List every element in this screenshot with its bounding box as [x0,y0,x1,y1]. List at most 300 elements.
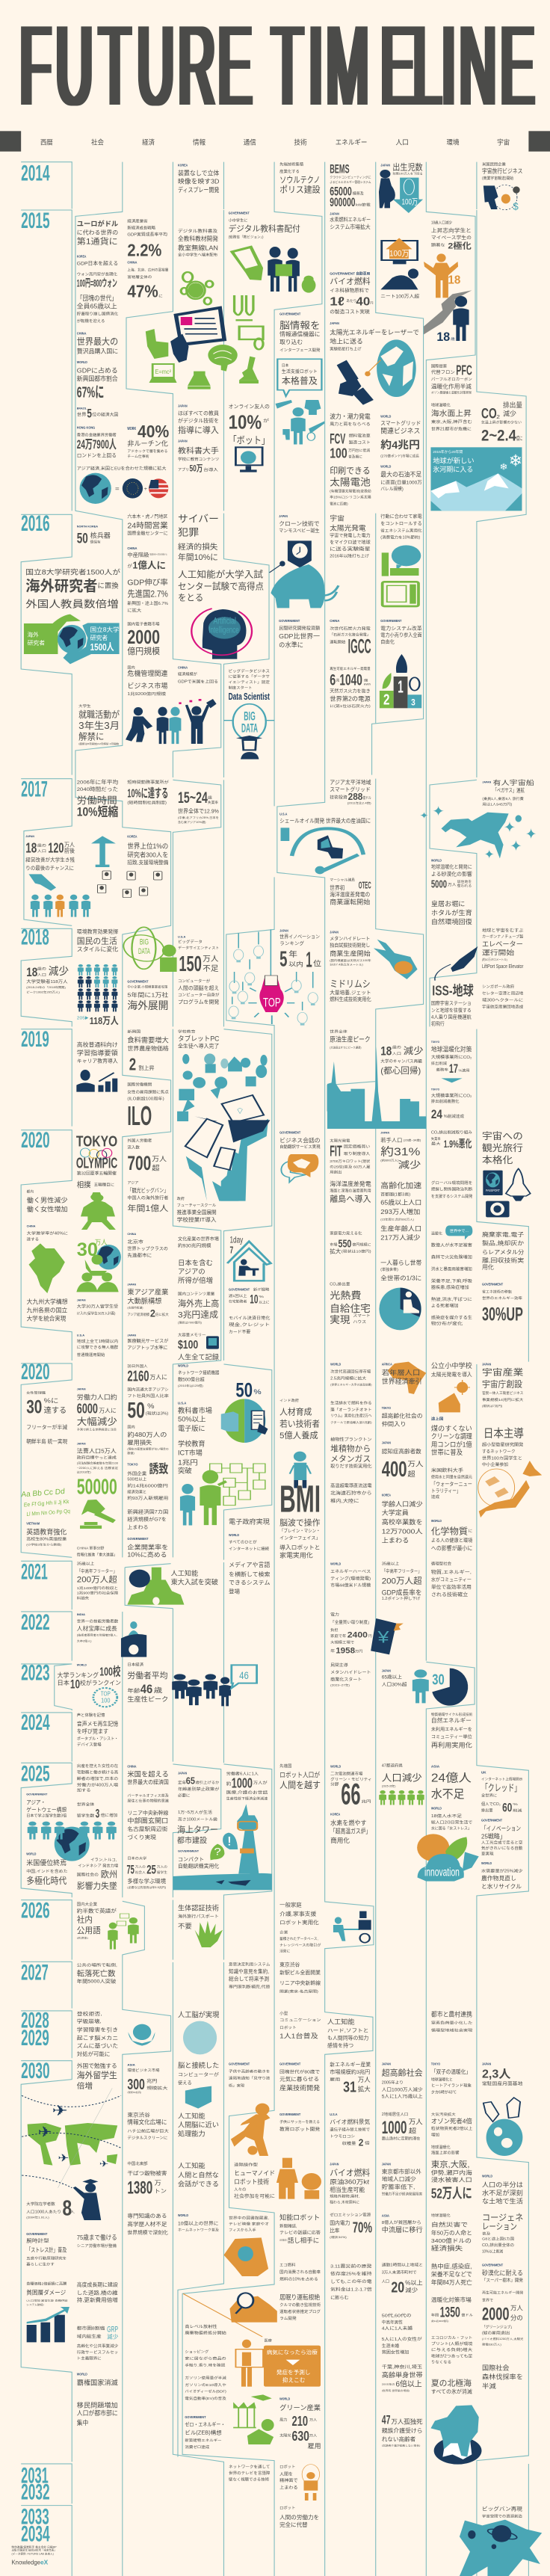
text: Asia gateway: アジア・ [26,1799,46,1805]
column: population second row: 12万7000人 [382,1528,423,1535]
text: electricity reform: 電力小売り参入全面 [380,632,422,638]
text: India engineers: インド政府 [279,1398,299,1403]
text: FCV and printable solar cell: 普及期に [348,454,362,459]
column: population final: 4人に1人未婚 [382,2326,412,2331]
text: Seoul technopolis: ソウルテクノ [279,175,321,185]
text: 2017 [21,777,48,801]
text: innovation 25 strategy: 気がきれいになる自動 [481,1846,522,1851]
text: worker age 46: 46 [140,1683,152,1696]
text: hydrogen [330,212,371,223]
text: space tourism: 宇宙への [482,1131,523,1141]
text: 2029 [21,2025,49,2050]
column: energy second row: 植物性プランクトン [330,1437,372,1442]
text: library and intelligent robot: 世界中の図書館蔵書, [229,2215,269,2220]
column: energy 2020: 自給住宅 [330,1304,371,1314]
text: green industry [279,2397,321,2450]
text: BEMS: よるビルエネルギー管理システム [330,180,371,185]
text: 2021 top of row [77,1561,451,1566]
text: BEMS: kW節電 [356,202,371,207]
text: innovation 25 strategy: と水リサイクル [481,1883,522,1890]
column: environment 2020: を支援するシステム開発 [431,1194,472,1199]
logo: KnowledgeX: eX [40,2559,48,2566]
icon: laptop and tablet [195,1095,264,1123]
text: asia smart grid: (2011年比2.4倍) [347,801,371,805]
text and icon: renewable second: 1040 [339,671,362,689]
column: environment 2030: ヒートアイランド現象 [431,2083,472,2088]
text: Tokyo Olympic [76,1133,117,1176]
text: network TV [229,2465,270,2482]
column: population second row: KOREA [382,1494,391,1497]
icon: robot and BMI: インターフェイス」 [279,1535,321,1541]
text: job hunting: 解禁に [78,732,104,742]
text: retirement 65: 定年 [178,1780,187,1785]
illustration: big bang splash with planet [460,2520,542,2576]
text: nuclear waste, shopping, gasoline, ZEB: ガソリンのE10導入や [185,2382,226,2388]
column: energy 2030: 稲わら,木材原料に [330,2199,359,2204]
text: top researchers [127,835,168,866]
column: energy second row: (世界エネルギー大手の波及効果) [330,1382,372,1386]
text: portable assist device [77,1712,118,1747]
text: crude oil peak: 原油生産ピーク [330,1035,371,1044]
text: English education Vietnam: 英語教育強化 [26,1527,67,1536]
column: environment 2020: 物分布が変化 [431,1321,463,1326]
column: economy growth: 47% [127,282,158,301]
column: energy 2030: 遺伝子組み替え技術で [330,2127,370,2132]
column: space final: 国際社会 [482,2364,510,2372]
chart: people pictogram [77,964,119,1026]
column: info devices and textbooks: U.S.A [178,1402,186,1405]
column: virtual office and Chubu: バーチャルオフィス普及 [127,1793,169,1798]
text: overseas expansion: 中小企業,小規模事業者攻策 [127,985,167,989]
text and icon: sumo: 五輪種目に [94,1183,114,1187]
text: GRP [107,2324,118,2334]
text: Asia gateway: GOVERNMENT [26,1793,47,1796]
chart: 50% pie: % [253,1389,262,1396]
text: 300000 students: 30 [77,1239,98,1260]
text: China military informatization: 情報化推進「重大進展」 [77,1553,117,1557]
icon: pegasus with stars [419,803,537,861]
text: wave power and FCV: FCV [330,431,345,447]
text: brain mechanisms: 対処が可能に [77,2050,110,2057]
icon: pointing hand [28,874,56,891]
column: energy second row: リウム」実用化(生産2万ヘ [330,1414,372,1418]
text: space elevator: 地球と宇宙をむすぶ [482,928,523,933]
text and chart: Asia economy equals US + EU: + [143,486,147,492]
icon: two 18 year olds with crack: 18 [448,273,460,286]
column: population 2030: 1000 [382,2118,407,2138]
text: drowsy driving: ラム開発 [279,2316,297,2321]
text: Tokyo climate policy: 大規模事業所にCO₂ [431,1054,472,1060]
column: population second row: 世界経済牽引 [382,1377,422,1385]
text: crude oil peak: 世界全体 [330,1029,347,1034]
text: job hunting: 大学生 [78,703,91,709]
text: fireflies: ホタルが生育 [431,909,472,916]
text: future school: フューチャースクール [177,1204,216,1208]
text: women workforce: CHINA [27,1224,36,1228]
text: circular community [431,2020,473,2033]
column: environment final: に与える負荷)増大 [431,2347,472,2352]
icon: NEET monitor house: ニート100万人超 [380,294,420,299]
text: Tokyo climate policy: 義務率 [436,1067,448,1072]
column: space final: 2000 [482,2304,510,2324]
text: 2022 [21,1609,50,1635]
text: clean stoves and water: 米国飲料大手 [431,1467,463,1473]
text: workforce 4 million: 宅勤務と働き続ける高 [77,1769,119,1775]
text: crisis management: 危機管理関連 [127,669,167,677]
text: smart grid: WORLD [380,415,392,419]
column: energy second row [330,1363,372,1504]
text: workforce 4 million [77,1763,119,1793]
column: population final: 47 [382,2414,390,2427]
icon: hands holding devices [185,1119,270,1201]
text: multipolar world: 影響力失墜 [77,1882,117,1891]
text: graduate students: (2004年1.91人) [26,2216,49,2219]
text: 度に [516,435,522,441]
column: economy 2020: 大動脈構想 [127,1296,161,1305]
text: workforce 4 million: 出産を控えた女性の在 [77,1763,119,1769]
text and icon: births under one million: JAPAN [380,164,390,167]
text: smart grid: 関連ビジネス [380,426,420,435]
column: energy second row: メタンガス [330,1454,371,1463]
text: robots replace labour: 完全に代替 [279,2521,308,2528]
column: world economy 2015: 67%に [77,384,104,401]
icon: artificial intelligence head [191,607,252,659]
column: world economy 2015: HONG KONG [77,426,95,430]
text: space elevator: カーボンナノチューブ製 [482,934,523,939]
text: desertification [431,859,472,890]
text: computers beat brain: コンピューター自身が [178,992,220,997]
text: IGCC [348,635,371,657]
text: food prices and ILO: 食料需要増大 [127,1035,169,1044]
column: population 2030: 2地域居住人口 [382,2112,408,2117]
column: information 2030: 人間脳に近い [178,2121,219,2129]
text: working hours: 10%短縮 [77,805,118,819]
panel: ice age [430,447,522,511]
text: teachers digital: 指導に導入 [178,425,219,434]
column: info devices and textbooks [178,1364,220,1475]
column: population 2020: 約31% [380,1145,420,1158]
text: data scientist shortage: ビッグデータ [178,940,203,944]
text: methane hydrate: (国内埋蔵量は天然ガス100年 [330,958,371,963]
text: 2028 [21,2008,49,2033]
text and icon: robot mental: 上まわる [279,2485,298,2490]
text: space tourism: 本格化 [482,1155,513,1165]
icon: light bulbs with TOP: TOP [263,996,281,1010]
column: population 2020: 293万人増加 [380,1208,420,1215]
column: economy 2020: アジア経済規模 [127,1312,150,1317]
column: population 2030: 8億人が貧困層から [382,2219,421,2225]
text: oil shortage: バレル規模) [380,486,404,492]
text: drones continued and medical tourism: に攻撃できる無人機群 [77,1345,118,1350]
icon and text: telework: GOVERNMENT [229,1288,250,1292]
text: nuclear waste, shopping, gasoline, ZEB: 高レベル放射性 [185,2323,217,2329]
column: visitors and foreign firms: 企業開業率を [127,1543,168,1551]
text: nuclear waste, shopping, gasoline, ZEB: 電気自動車(EV)の普及 [185,2396,226,2401]
column: economy 2020: 倍に拡大 [155,1312,169,1317]
text: campus back to city [380,1045,424,1075]
text: big bang [482,2505,522,2518]
text and icon: career education: 学習指導要領 [77,1049,118,1057]
text: nuclear waste, shopping, gasoline, ZEB: 廃棄物最終処分開始 [185,2330,226,2335]
column: income and content: 文化産業の世界市場 [178,1236,219,1242]
text: top researchers: KOREA [127,835,138,839]
text: Pegasus spacecraft: 「ペガサス」運航 [493,787,525,793]
text: 3D display: ディスプレー開発 [178,186,219,194]
text: non routine work: 40% [138,422,169,442]
text: 2016 [21,511,50,536]
column: workforce and lawyers: 万人に [99,1408,117,1414]
column: population second row: 万人 [407,1461,424,1468]
column: workforce and lawyers: 予測で終える世界経済に注目 [77,1427,117,1432]
text: BEMS: クラウドコンピューティングに [330,176,371,179]
text: water and cogeneration: 水不足が深刻 [482,2189,523,2197]
text: food prices and ILO: 国際労働機関 [127,1082,152,1087]
text: innovation ranking: 5 [279,948,287,971]
text: space agency: 官民一体人工衛星ビジネス [482,1390,524,1396]
column: population final: 通勤1時間以上地域と [382,2263,423,2267]
text: women managers [26,1390,67,1444]
column: visitors and foreign firms: 10%に高める [127,1550,167,1559]
header band: 西暦 [40,138,53,147]
text: PFC: 温暖化作用半減 [431,383,472,389]
column: population 2030: 5人に1人75歳以上 [382,2094,423,2099]
text: PFC: オゾン層破壊と温暖化対策実現 [431,391,472,395]
text: nursing care: 医療,介護のお世話 [226,1790,268,1795]
text: methane commercial: 民間主導 [330,1662,348,1668]
column: energy 2020: 離島へ導入 [330,1195,371,1204]
text: methane hydrate [330,931,371,967]
text: data scientist shortage [178,935,219,976]
text: no hegemonic nation [77,2373,118,2426]
text: middle age freeters: 1兆900億円の社会保険 [77,1590,119,1595]
column: population 2020: (約800万人) [380,1158,399,1162]
text: middle age freeters [77,1568,119,1600]
icon and text: telework: 10 [250,1292,258,1306]
column: population second row: 超高齢化社会の [382,1412,423,1419]
text: asia smart grid [330,779,371,805]
column: population second row: 大学定員 [382,1509,409,1517]
column: virtual office and Chubu: づくり実現 [127,1834,156,1840]
heading: digital textbook: デジタル教科書配付 [229,224,300,233]
text: innovation ranking: 年 [288,950,297,958]
text: personal CO2: % [513,1803,518,1807]
text: freeters population: GDP成長率を [382,1589,422,1597]
text: food prices and ILO: 2 [129,1055,136,1074]
text: care robots [279,1902,321,1953]
column: population final: 50代,60代の [382,2313,412,2318]
column: population 2020: 217万人減少 [380,1233,421,1242]
text: sea tower city: 1万~5万人が生活 [178,1810,212,1815]
text: AI passes exam [178,570,264,603]
icon: NEET monitor house [380,238,420,299]
text: graduate students: 8 [63,2197,72,2220]
text: job hunting [78,703,120,745]
illustration: world map with planes: ✈ [52,2104,68,2119]
text: 300000 students: 万人 [95,1239,108,1246]
text: digital textbooks infrastructure: 全小中学生へ端末配布 [178,252,217,257]
text: no hegemonic nation: 集中 [77,2419,88,2426]
text: women managers: フリーターが半減 [26,1424,67,1430]
text: euglena: 大量培養,ジェット [330,989,371,996]
text: working hours: 労働時間 [77,795,117,806]
icon and text: telework: % [259,1295,264,1299]
text: wave power and FCV: 製造コスト [349,440,371,445]
column: workforce and lawyers: 50000 [77,1476,117,1499]
column: space final: 万人 [510,2305,523,2312]
text: no hegemonic nation: WORLD [77,2373,87,2376]
icon: pegasus with stars: ✦ [432,803,445,819]
column: virtual office and Chubu: 日本の大学 [127,1856,146,1861]
text: OTEC [330,877,371,898]
text: roads upkeep and GRP: 行政サービスフルセッ [77,2349,118,2355]
column: economy 2030: 300 [127,2076,145,2093]
text: nuclear waste, shopping, gasoline, ZEB: ガソリン使用量が半減 [185,2376,226,2380]
text and chart: Asia economy equals US + EU: ロンドンを上回る [77,453,117,458]
column: population 2030: 中流層に移行 [382,2225,423,2234]
text: food prices and ILO: (ILO創設100周年) [127,1097,164,1101]
text: cross-language search: 登場 [229,1588,240,1594]
text: community energy: 再利用実用化 [431,1741,472,1749]
column: energy 2030: バイオ燃料景気 [330,2119,370,2125]
text: battery market trillion yen and hydrogen: 「超高温ガス炉」 [330,1827,371,1835]
column: population 2020: 減少 [398,1159,421,1171]
text: battery market trillion yen and hydrogen: KOREA [330,1813,340,1817]
text: battery market trillion yen and hydrogen: 商用化 [330,1837,350,1844]
icon: top 100 laurel [93,1688,117,1707]
text: graduate students [26,2197,117,2243]
chart: rising bars [27,2307,69,2342]
text: nursing care continued: 生産性低下経済全体減速 [226,1796,268,1801]
text: OTEC: 世界初 [330,884,344,891]
text: 2021 top of row: 循環型社会 [431,1561,451,1566]
column: environment final: (約11兆3600億円) [431,2320,448,2323]
column: population 2030: 万人 [409,2119,423,2126]
column: energy 2030: 倍 [365,2140,370,2145]
text: lifestyle change [77,928,118,953]
icon: yen battery [371,1618,404,1654]
text: green industry: 210 [292,2414,308,2429]
text: clean stoves and water: 用コンロが1億 [431,1440,472,1449]
text: accept foreign students: け入れ(留学生30万人計画) [77,1310,116,1316]
column: environment 2030 [431,2062,473,2244]
text: university ranking: 日本 [58,1679,69,1686]
text and icon: data scientist: DATA [241,721,258,735]
text: nuclear North Korea: NORTH KOREA [77,525,98,529]
text and icon: smart appliances [380,514,422,606]
text: innovation 25 strategy: 25戦略」 [481,1832,506,1840]
column: virtual office and Chubu [126,1793,169,1889]
text: clean stoves and water: 化学物質 [431,1526,468,1537]
column: environment 2020: 感染症を媒介する生 [431,1315,472,1320]
text: working hours [77,779,118,819]
text: BEMS: 900000 [330,196,356,209]
text: hydrogen: 水素燃料エネルギー [330,216,371,223]
text: smart grid: スマートグリッド [380,419,421,426]
column: environment final: プリント(人類が環境 [431,2341,472,2347]
column: visitors and foreign firms [127,1364,169,1559]
column: income and content: 所得が倍増 [178,1276,213,1284]
text: 2024 [21,1710,50,1735]
text: drowsy driving: 運転者状態推定プログ [279,2309,321,2314]
text: ISS earth [431,983,474,1026]
chart: 50% pie [221,1379,268,1443]
text: accept foreign students: JAPAN [77,1298,86,1302]
text: innovation ranking: 世界イノベーション [279,933,320,940]
text: falling deaths: 公共の場所で転倒, [77,1962,117,1968]
text: feed-in tariff: 万円 [355,1650,362,1654]
text: India engineers: 若い技術者 [279,1419,320,1429]
column: environment 2020: 器疾患,感染症増加 [431,1284,469,1290]
column: energy 2020: 海面と深海の温度差利用 [330,1188,371,1193]
text: water and cogeneration: 普及 [482,2231,491,2236]
text: nuclear dependency: 3.11震災前の原発 [330,2264,372,2269]
text: space tourism [482,1131,523,1165]
text: nuclear waste, shopping, gasoline, ZEB: ビル(ZEB)構想 [185,2429,222,2435]
column: environment final: 温暖化対策市場 [431,2296,472,2303]
text: OTEC [359,880,371,891]
text: brain mechanisms: 起こす脳メカニ [77,2034,118,2041]
illustration: world map with planes: ✈ [58,2152,69,2164]
column: population final: 万人孤独死 [391,2418,423,2426]
chart: energy podium: 1 [398,677,404,697]
column: space final: 半減 [482,2382,496,2390]
text: sea level: 地球温暖化 [431,402,451,407]
column: population second row: 認知症高齢者数 [382,1448,421,1455]
text: library and intelligent robot: 話し相手に [288,2237,319,2244]
text: non routine work [127,422,169,448]
text: 2019 [21,1026,49,1052]
text: decision systems: 専門家判断補完,代替 [229,1984,270,1989]
text: 2026 [21,1898,50,1923]
text: care robots: ナレッジベースの取引が [279,1942,321,1947]
column: population 2030: JAPAN [382,2163,391,2166]
text and chart: 30% over 65: JAPAN [382,1669,391,1673]
callout: support robots: 本格普及 [282,376,318,386]
column: income and content: 約930兆円規模 [178,1243,211,1248]
column: world economy 2015: 世界 [77,412,87,417]
text: moon base [482,2062,523,2086]
icon: graduate [73,2179,101,2220]
text: retirement 65: 年齢差別禁止政策が [178,1786,220,1792]
header band: 社会 [91,138,104,147]
text: sea level: 東京,大阪,神戸含む [431,419,472,425]
icon and text: telework: 以上に [259,1299,270,1304]
text: US drones: U.S.A [77,1334,84,1337]
chart: people pictogram: 118万人 [90,1016,119,1026]
text: rare metal recovery: 離,回収技術実 [482,1257,524,1263]
text: women managers: %に [44,1397,58,1405]
text: AI passes Tokyo University: 人工知能 [171,1569,199,1577]
text: women workforce: 大学進学率が40%に [27,1231,68,1236]
text: 2021 top of row: 35歳以上 [77,1561,94,1566]
column: economy 2020: (古城市街道) [127,1306,143,1309]
icon: wind and solar [233,2394,274,2444]
text: circular community: 窒素負荷量小化した [431,2020,473,2025]
column: 24 hour district and ebook: 国内電子書籍市場 [127,621,160,626]
text: drones continued and medical tourism: アジアトップ水準に [127,1345,167,1351]
column: energy 2020: 家庭電力見える化 [330,1231,362,1236]
text: ISS earth: ISS-地球 [432,983,474,999]
text: Japan leads satellites: 日本主導 [483,1427,524,1440]
text: stress meter and senior labour: シニア労働市場が整備 [77,2243,117,2249]
text: IGCC: 運転開始 [330,640,345,644]
text: clean stoves and water: 「ウォーターニュー [431,1482,472,1487]
text: job hunting: 就職活動が [78,709,120,720]
text: circular society [431,1568,472,1597]
text and icon: English official language [77,1902,139,1950]
column: information 2030: 処理能力 [178,2130,206,2138]
column: energy 2030: 国内電力 [330,2219,350,2226]
